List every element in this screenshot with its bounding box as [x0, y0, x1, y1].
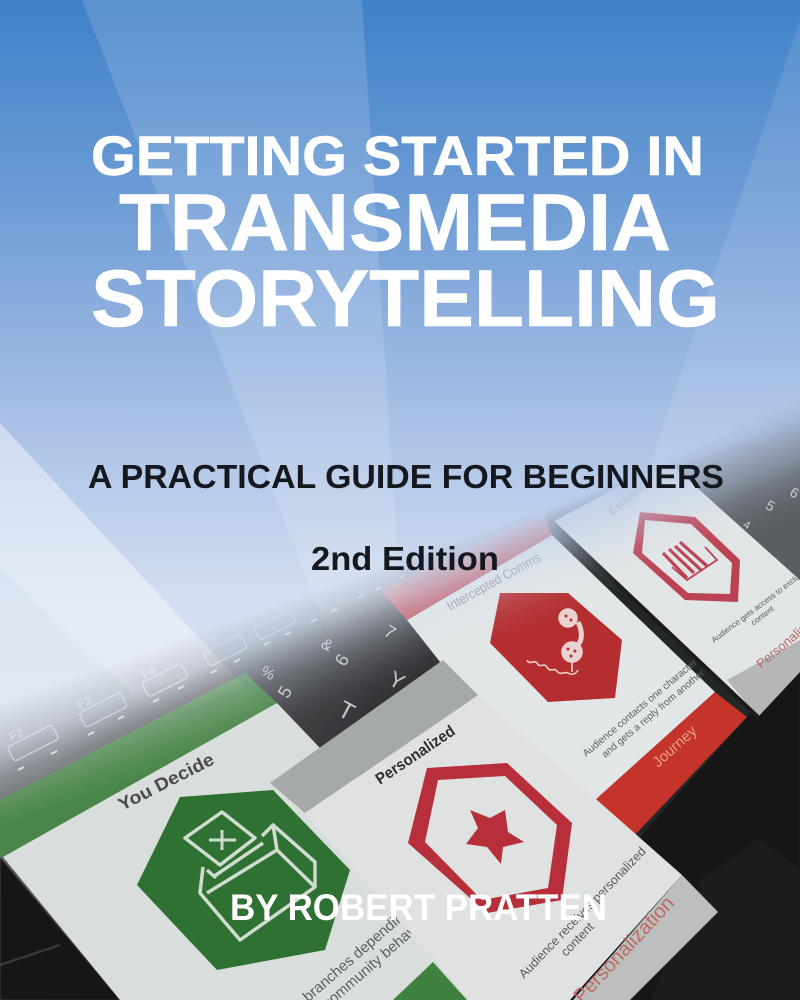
- keyboard keys and legends: [7, 484, 800, 770]
- keyboard legends: 6: [331, 651, 353, 669]
- exclusive hexagon: [633, 512, 740, 602]
- description: Personalized: content: [558, 920, 597, 959]
- keyboard legends: F4: [139, 663, 158, 682]
- description: Exclusive: content: [749, 604, 776, 627]
- bottom green strip: [393, 962, 467, 1000]
- keyboard legends: [7, 484, 800, 744]
- description: Personalized: Audience receives personalized: [516, 844, 649, 981]
- card: You Decide: [0, 673, 480, 1000]
- label: Personalized: Personalized: [373, 723, 459, 788]
- edition: 2nd Edition: [311, 540, 499, 577]
- card: Exclusive: [548, 460, 800, 717]
- laptop keyboard and desk: [0, 407, 800, 1000]
- label: Journey: Journey: [649, 722, 701, 771]
- photo of cards on a laptop keyboard: [0, 407, 800, 1000]
- keyboard legends: 5: [274, 683, 296, 701]
- subtitle: A PRACTICAL GUIDE FOR BEGINNERS: [88, 458, 724, 495]
- icon: ballot box: [185, 812, 315, 940]
- keyboard legends: T: [333, 696, 359, 727]
- keyboard legends: 7: [381, 621, 399, 643]
- card strip: Journey: [593, 692, 747, 840]
- red hexagon: [490, 593, 622, 702]
- keyboard legends: Y: [384, 666, 409, 695]
- icon: bars: [663, 542, 717, 580]
- red hexagon outline: [408, 763, 572, 913]
- label: Intercepted Comms: Intercepted Comms: [444, 549, 543, 614]
- title line 2: TRANSMEDIA: [119, 178, 671, 268]
- icon: telephone: [527, 610, 582, 674]
- title line 3: STORYTELLING: [91, 254, 720, 344]
- key indicator dashes: [18, 575, 405, 770]
- title: [91, 124, 720, 344]
- card strip: faded red: [380, 512, 552, 620]
- green hexagon: [137, 790, 350, 970]
- card strip: Personalization: [727, 640, 800, 717]
- description: Intercepted Comms: Audience contacts one character: [581, 657, 700, 759]
- icon: star: [466, 810, 524, 864]
- label: You Decide: You Decide: [115, 749, 217, 815]
- keyboard legends: %: [258, 663, 278, 684]
- card: Intercepted Comms: [380, 512, 747, 840]
- author: BY ROBERT PRATTEN: [230, 887, 607, 928]
- grey strip: [270, 660, 478, 813]
- title line 1: GETTING STARTED IN: [91, 124, 704, 187]
- keyboard legends: 4: [741, 519, 752, 532]
- card: Personalized: [270, 660, 718, 1000]
- keyboard legends: F2: [7, 725, 26, 744]
- keyboard legends: F5: [201, 633, 220, 652]
- keyboard legends: F3: [75, 693, 94, 712]
- keyboard legends: 5: [763, 497, 778, 515]
- keyboard legends: &: [318, 635, 336, 656]
- card strip: Personalization: [573, 875, 718, 1000]
- description: Intercepted Comms: and gets a reply from another: [600, 667, 708, 760]
- label: Exclusive: Exclusive: [606, 479, 650, 517]
